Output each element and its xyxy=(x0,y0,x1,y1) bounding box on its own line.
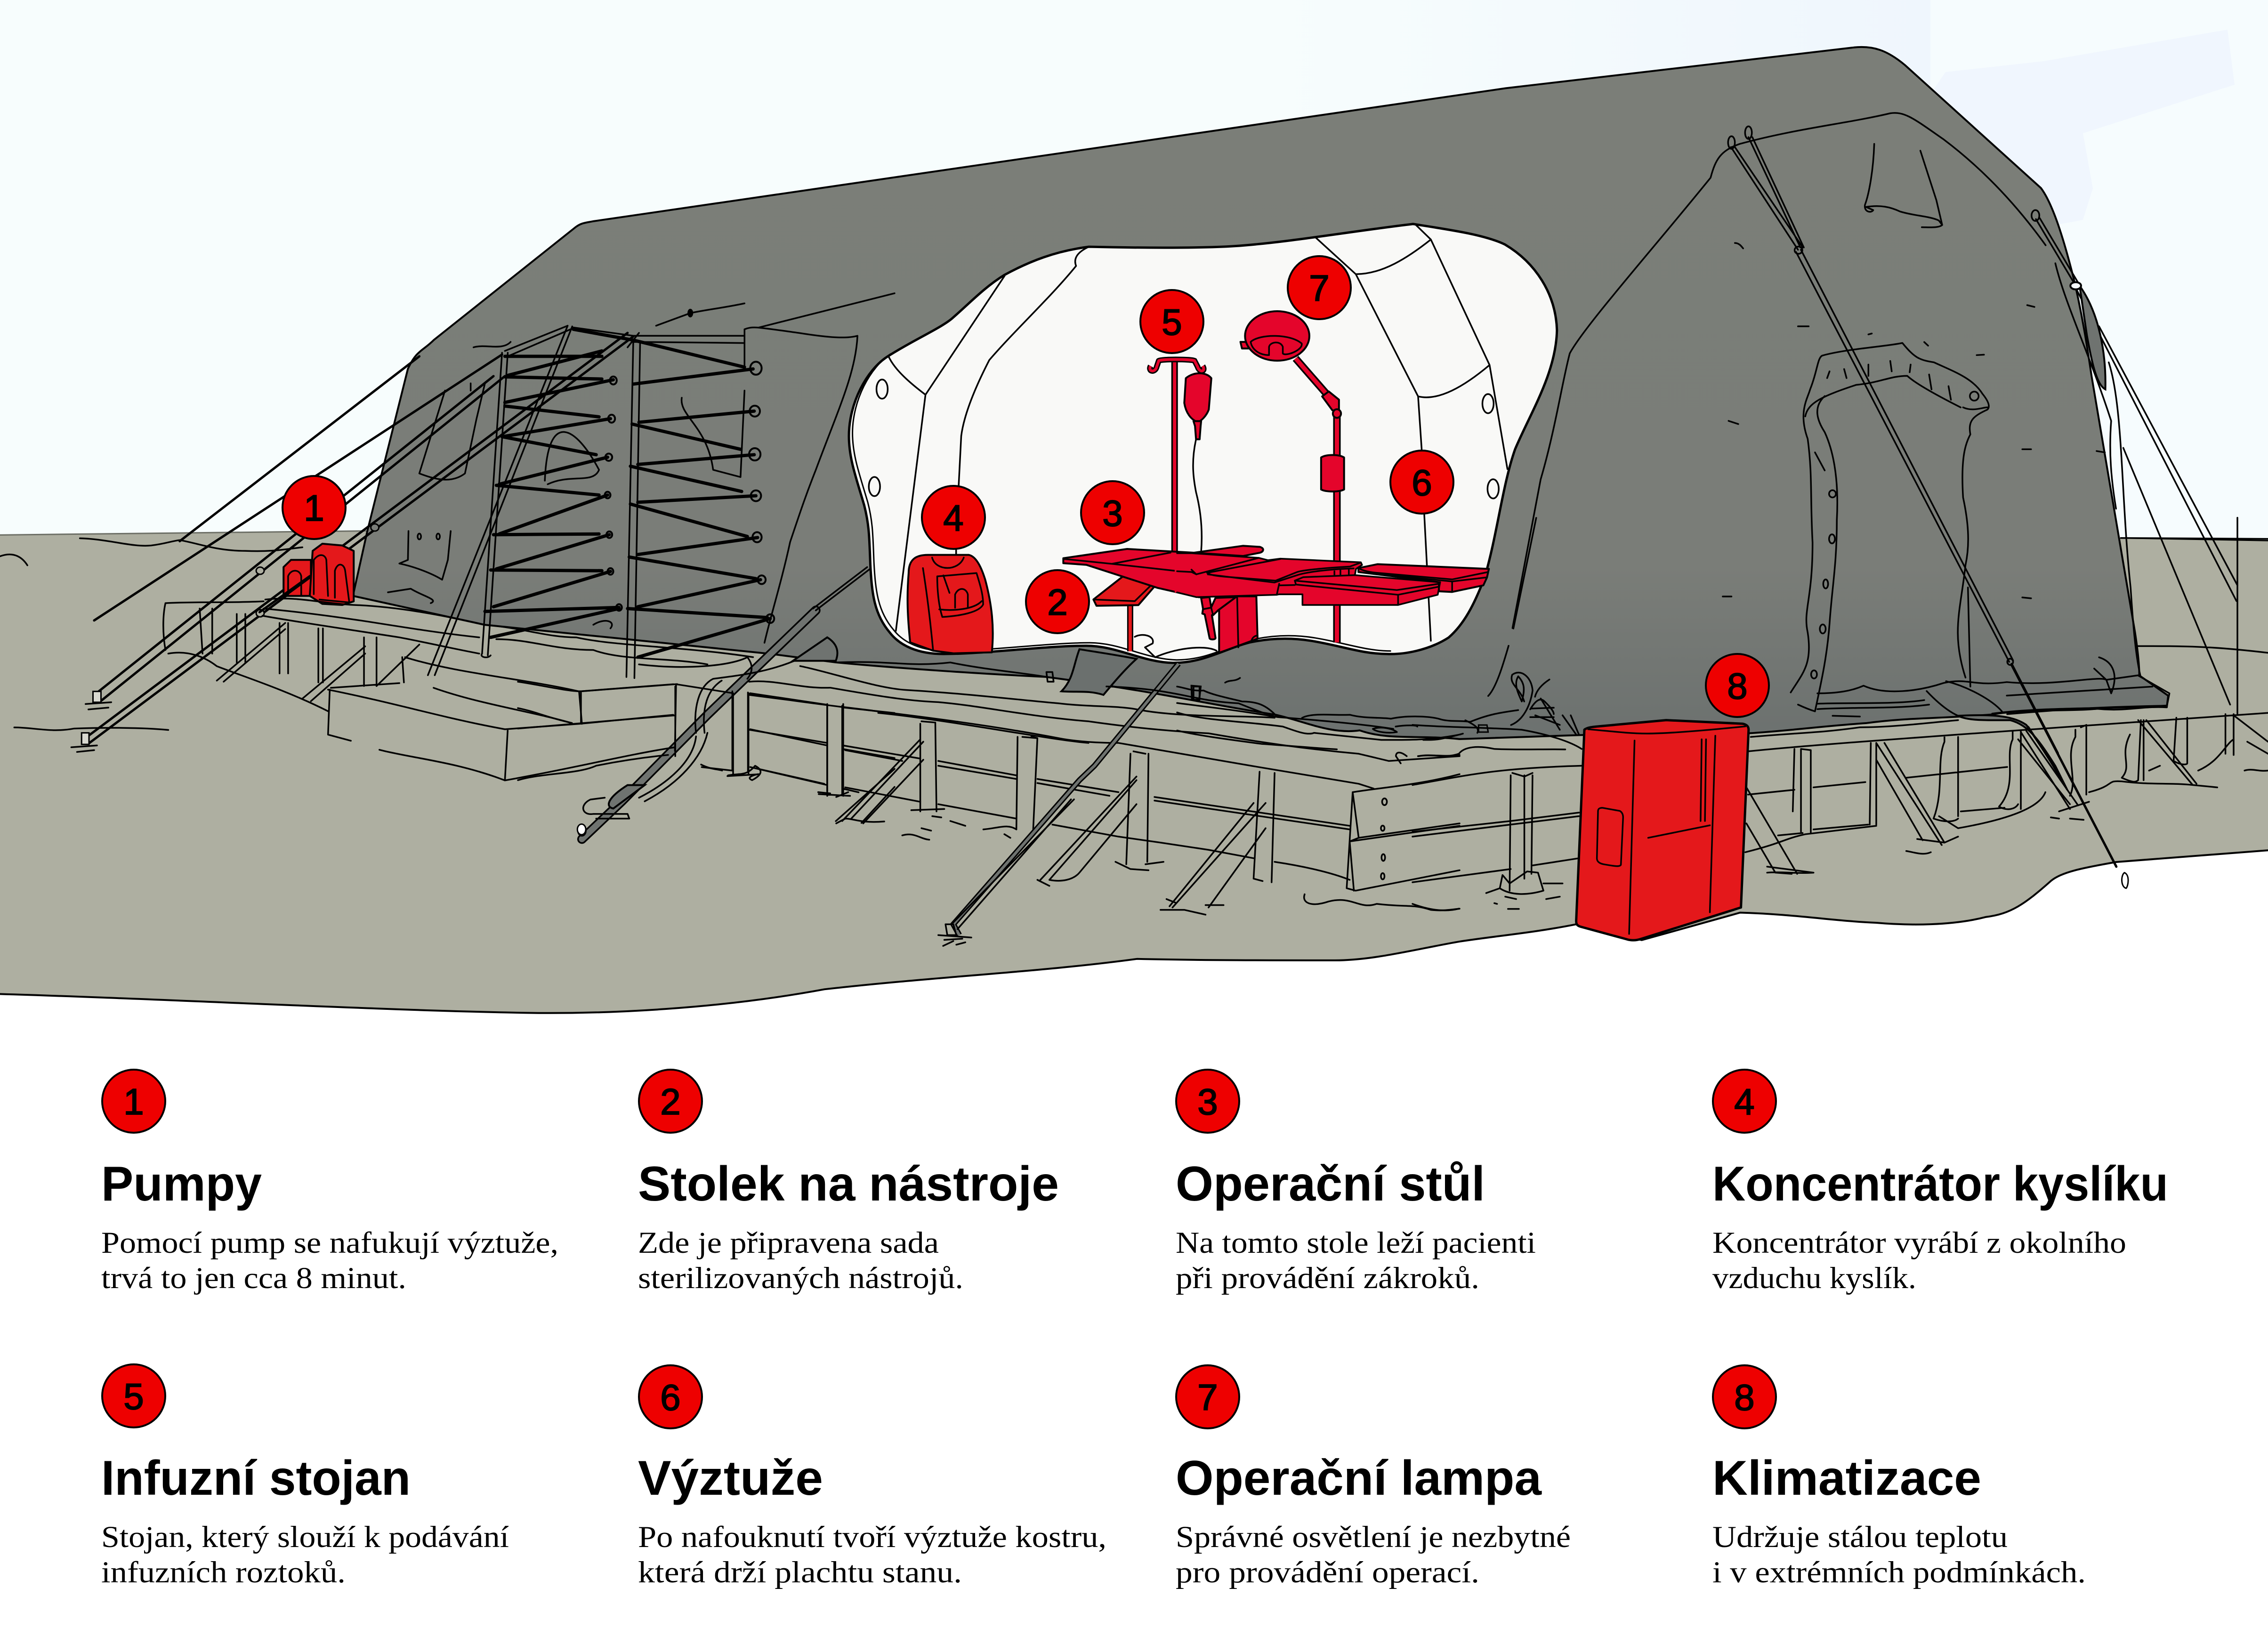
legend item 7: Operační lampa: 7 xyxy=(1197,1377,1218,1418)
legend item 2: Stolek na nástroje: Stolek na nástroje xyxy=(638,1157,1059,1211)
marker 6 xyxy=(1390,451,1453,514)
sky background xyxy=(0,0,2268,565)
legend item 8: Klimatizace: i v extrémních podmínkách. xyxy=(1712,1555,2086,1589)
legend item 4: Koncentrátor kyslíku xyxy=(1712,1070,2168,1295)
marker 1 xyxy=(282,476,346,539)
legend item 4: Koncentrátor kyslíku: 4 xyxy=(1734,1081,1755,1122)
legend item 8: Klimatizace: Udržuje stálou teplotu xyxy=(1712,1520,2008,1554)
ground outline xyxy=(0,531,2268,1013)
legend item 7: Operační lampa: Správné osvětlení je nezbytné xyxy=(1176,1520,1571,1554)
marker 5: 5 xyxy=(1162,301,1182,343)
scaffold frame xyxy=(428,326,744,678)
tent right details xyxy=(1512,113,2268,753)
icon: operating table, left part xyxy=(1063,549,1204,597)
legend item 5: Infuzní stojan: 5 xyxy=(123,1376,144,1417)
icon: oxygen concentrator xyxy=(908,555,993,653)
red equipment inside tent xyxy=(908,311,1344,653)
marker 1: 1 xyxy=(304,487,324,529)
ground xyxy=(0,531,2268,1013)
legend item 2: Stolek na nástroje: 2 xyxy=(660,1081,681,1122)
platform wall right xyxy=(1412,665,2268,911)
platform wall center xyxy=(518,649,1460,946)
icon: instrument stool xyxy=(1093,572,1162,652)
legend item 8: Klimatizace: 8 xyxy=(1734,1377,1755,1418)
legend item 3: Operační stůl: 3 xyxy=(1197,1081,1218,1122)
marker 2: 2 xyxy=(1047,581,1068,623)
icon: pumps xyxy=(259,544,354,612)
legend item 7: Operační lampa xyxy=(1176,1365,1571,1589)
tent opening interior xyxy=(849,224,1557,663)
legend item 6: Výztuže: Výztuže xyxy=(638,1451,823,1506)
legend item 6: Výztuže: Po nafouknutí tvoří výztuže kostru, xyxy=(638,1520,1106,1554)
legend item 1: Pumpy: 1 xyxy=(123,1081,144,1122)
legend item 1: Pumpy: trvá to jen cca 8 minut. xyxy=(101,1261,406,1295)
platform and snow blocks left xyxy=(163,598,895,823)
scaffold and lacing on tent wall xyxy=(428,326,774,678)
thick lacing xyxy=(485,329,774,657)
legend item 3: Operační stůl: Operační stůl xyxy=(1176,1157,1485,1211)
legend item 5: Infuzní stojan: infuzních roztoků. xyxy=(101,1555,346,1589)
legend item 1: Pumpy xyxy=(101,1070,558,1295)
numbered markers on illustration xyxy=(282,256,1769,717)
legend item 5: Infuzní stojan: Stojan, který slouží k podávání xyxy=(101,1520,509,1554)
legend item 2: Stolek na nástroje xyxy=(638,1070,1059,1295)
legend item 6: Výztuže: která drží plachtu stanu. xyxy=(638,1555,962,1589)
legend item 8: Klimatizace: Klimatizace xyxy=(1712,1451,1981,1506)
tent left wall details xyxy=(388,293,895,839)
legend item 3: Operační stůl: při provádění zákroků. xyxy=(1176,1261,1479,1295)
legend item 6: Výztuže xyxy=(638,1365,1106,1589)
legend item 3: Operační stůl xyxy=(1176,1070,1536,1295)
legend item 3: Operační stůl: Na tomto stole leží pacienti xyxy=(1176,1226,1536,1259)
legend item 5: Infuzní stojan xyxy=(101,1364,509,1589)
marker 7 xyxy=(1288,256,1351,319)
legend item 4: Koncentrátor kyslíku: Koncentrátor kyslíku xyxy=(1712,1157,2168,1211)
legend item 2: Stolek na nástroje: Zde je připravena sada xyxy=(638,1226,939,1259)
marker 3 xyxy=(1081,481,1144,544)
marker 4: 4 xyxy=(943,497,964,539)
legend item 5: Infuzní stojan: Infuzní stojan xyxy=(101,1451,411,1506)
marker 6: 6 xyxy=(1412,462,1432,503)
marker 5 xyxy=(1140,290,1203,353)
legend item 4: Koncentrátor kyslíku: Koncentrátor vyrábí z okolního xyxy=(1712,1226,2126,1259)
marker 8 xyxy=(1706,654,1769,717)
marker 2 xyxy=(1026,570,1089,633)
marker 4 xyxy=(922,486,985,549)
marker 7: 7 xyxy=(1309,267,1330,309)
guy ropes left xyxy=(0,333,633,752)
legend item 1: Pumpy: Pomocí pump se nafukují výztuže, xyxy=(101,1226,558,1259)
icon: operating table, right part xyxy=(1175,546,1489,653)
tent body xyxy=(353,47,2168,739)
icon: air conditioner xyxy=(1576,720,1749,940)
tent hem, rope loop and folds below opening xyxy=(1177,518,1554,750)
legend item 8: Klimatizace xyxy=(1712,1365,2086,1589)
legend item 7: Operační lampa: Operační lampa xyxy=(1176,1451,1542,1506)
legend item 7: Operační lampa: pro provádění operací. xyxy=(1176,1555,1479,1589)
legend item 2: Stolek na nástroje: sterilizovaných nástrojů. xyxy=(638,1261,963,1295)
icon: infusion stand xyxy=(1150,360,1211,553)
marker 3: 3 xyxy=(1102,492,1123,534)
legend item 4: Koncentrátor kyslíku: vzduchu kyslík. xyxy=(1712,1261,1916,1295)
icon: operating lamp xyxy=(1241,311,1344,643)
legend item 1: Pumpy: Pumpy xyxy=(101,1157,262,1211)
marker 8: 8 xyxy=(1727,665,1748,707)
legend item 6: Výztuže: 6 xyxy=(660,1377,681,1418)
